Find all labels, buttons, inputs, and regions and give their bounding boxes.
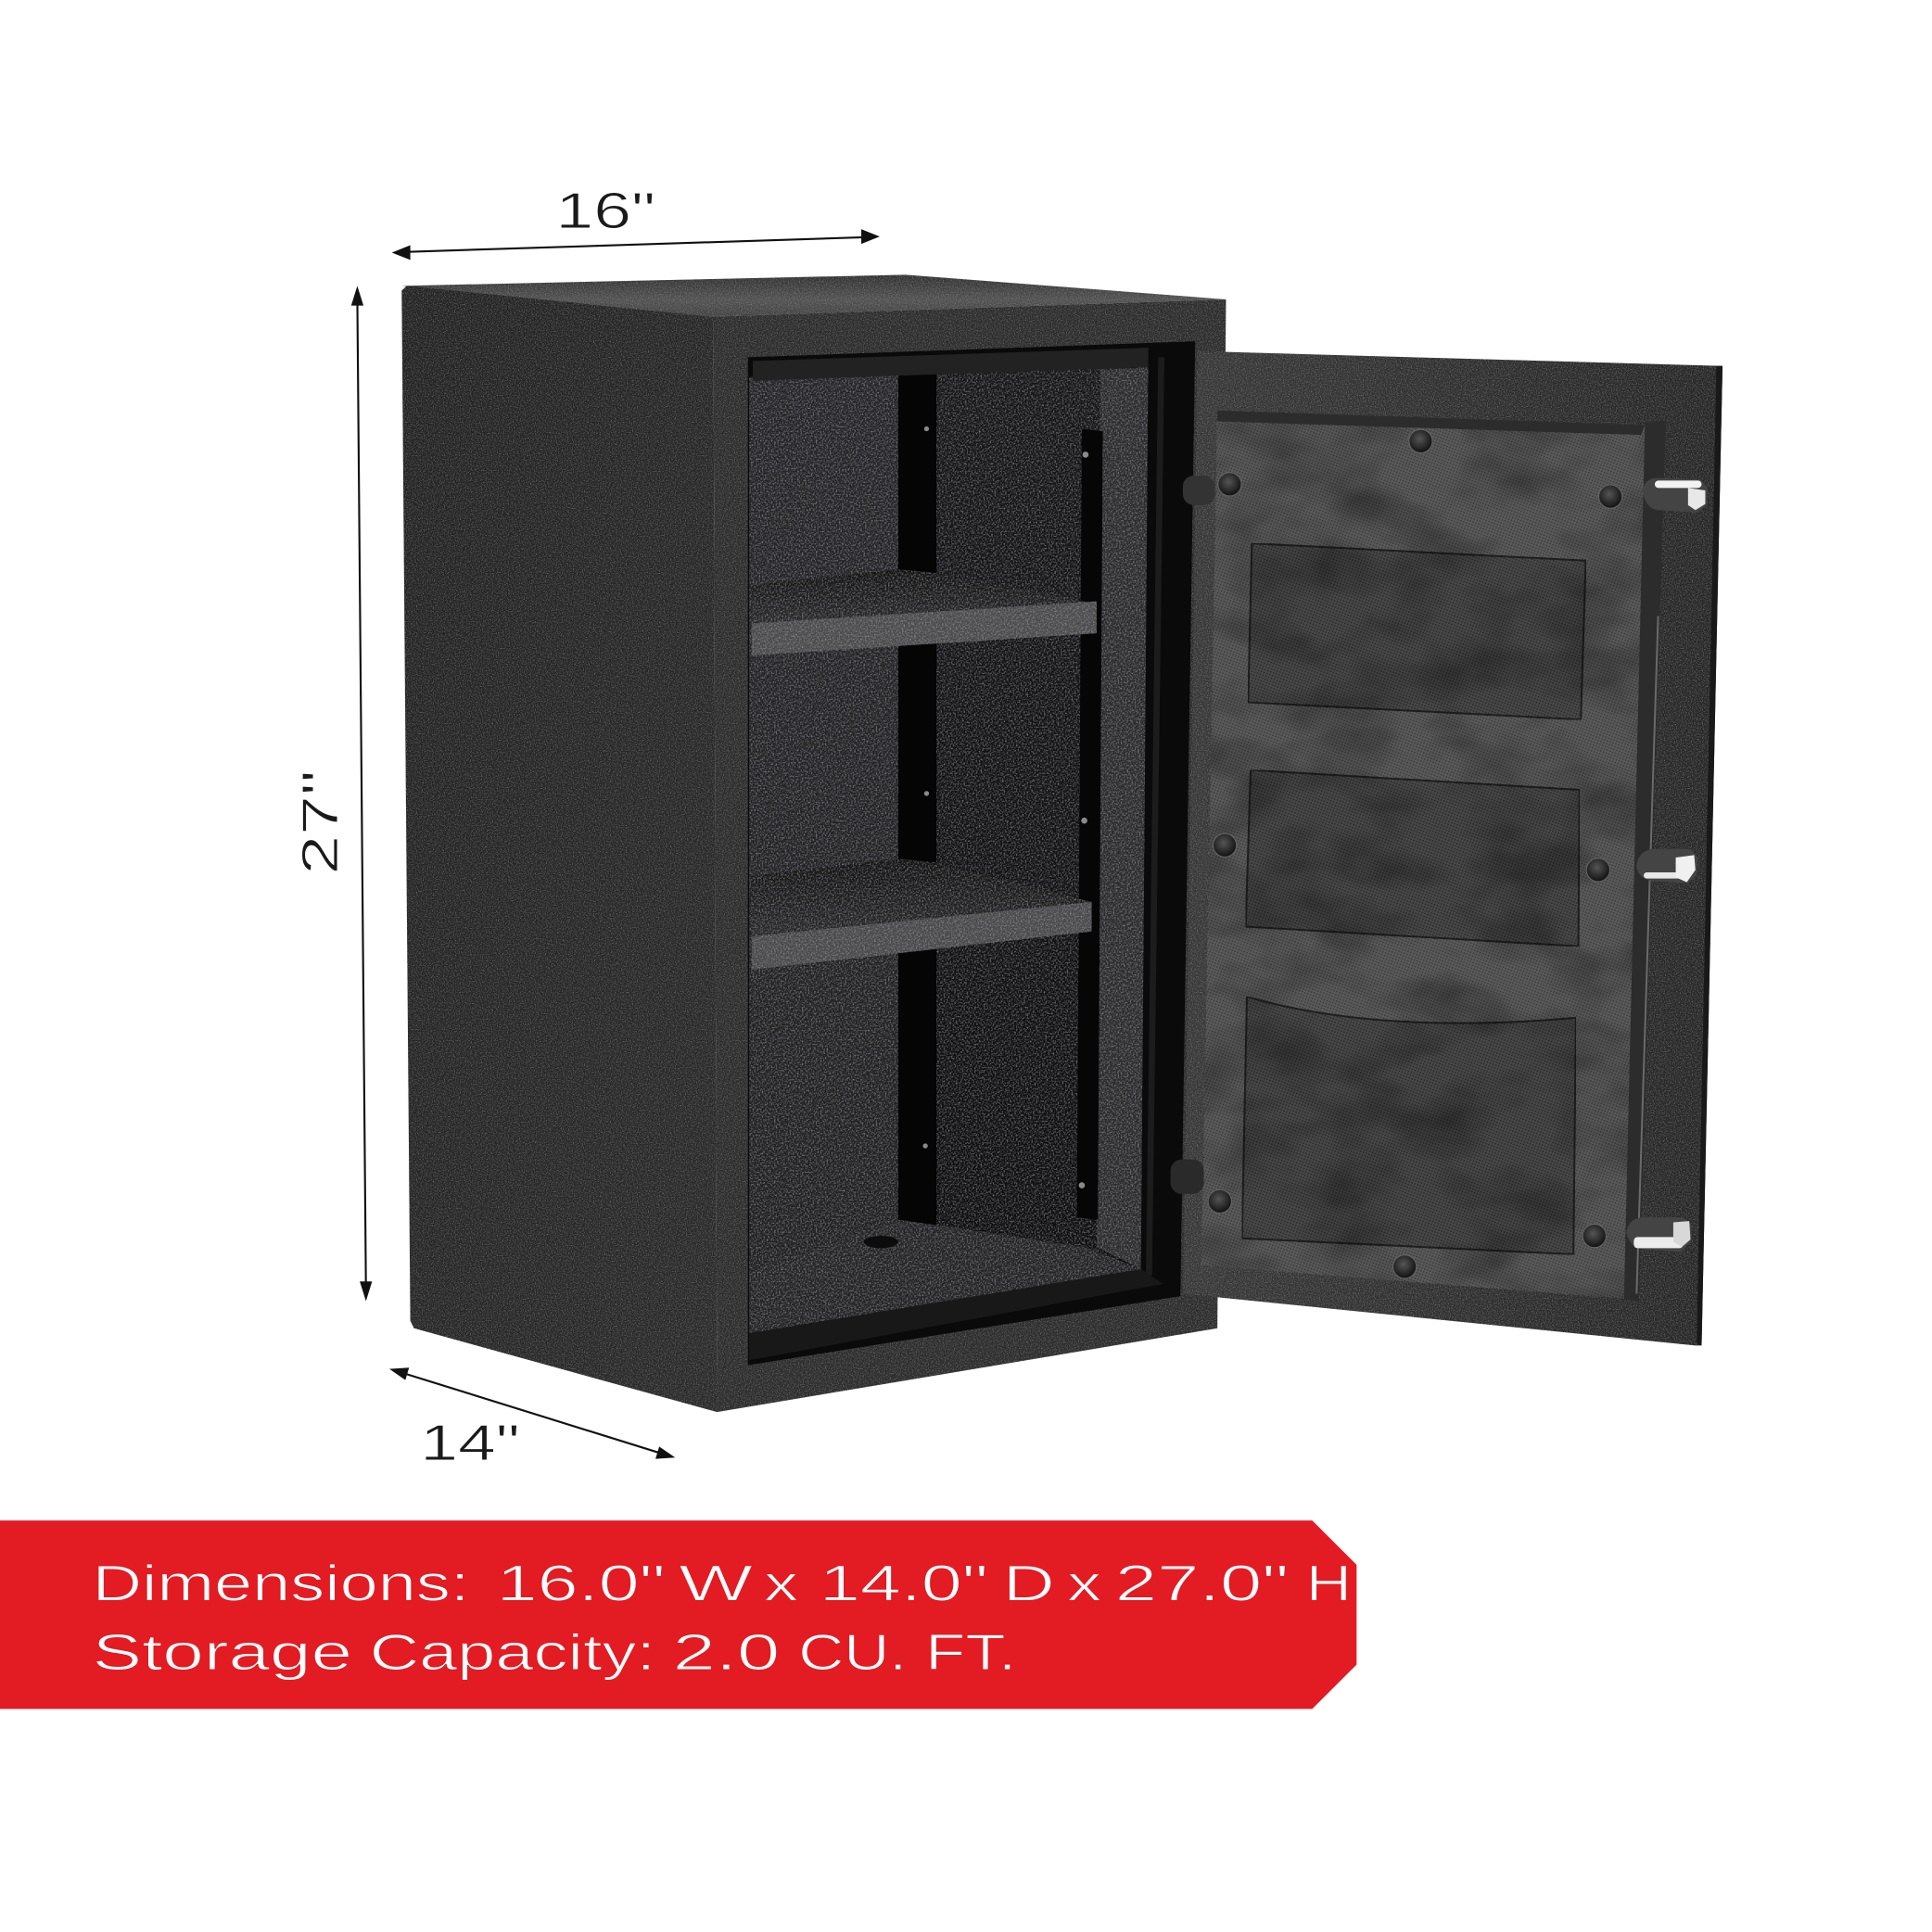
dimensions text: 27.0" [1115,1555,1289,1611]
dimensions text: 14.0" [820,1555,988,1611]
interior back wall [899,367,1149,1259]
bevel highlight [1635,616,1659,1294]
red banner [0,1520,1356,1709]
lower shelf top [752,858,1092,936]
floor bolt [864,1236,898,1248]
label: height 27 inches: 27" [292,770,349,875]
door opening [748,341,1195,1366]
rivets [1208,429,1622,1278]
storage capacity text [93,1624,1016,1681]
pocket one [1248,543,1586,719]
lower shelf front edge [752,902,1092,970]
safe body [401,274,1226,1412]
dimensions text: H [1306,1555,1352,1611]
chrome bolt top [1643,478,1708,513]
bottom door gasket [749,1269,1163,1360]
left side face [401,286,718,1412]
pocket three [1242,997,1576,1254]
height arrow [351,286,372,1302]
right gasket highlight [1146,357,1164,1276]
hinge top [1183,476,1214,505]
dimensions text: W [679,1555,754,1611]
banner shape [0,1520,1356,1709]
label: depth 14 inches: 14" [420,1415,520,1471]
hinge bottom [1171,1160,1204,1194]
shelf rail [1077,429,1103,1220]
dimensions text: x [764,1555,798,1611]
upper shelf front edge [752,602,1097,655]
storage capacity text: 2.0 [673,1624,780,1681]
dimensions text: x [1067,1555,1101,1611]
rear corner black strip [898,372,936,1232]
top door gasket [753,348,1158,381]
fabric panel top lip [1217,411,1645,435]
door plate [1183,351,1722,1345]
floor carpet [749,1220,1142,1333]
shelf screws [922,426,1088,1188]
open door [1171,351,1722,1345]
chrome bolt middle [1636,849,1697,883]
storage capacity text: FT. [925,1624,1016,1681]
dimensions text: 16.0" [497,1555,666,1611]
top face [401,274,1226,317]
label: width 16 inches: 16" [555,183,655,239]
depth arrow [389,1367,675,1459]
interior right wall carpet [1097,367,1149,1269]
right door gasket [1141,342,1193,1294]
front frame [714,299,1226,1412]
dimensions text: D [1003,1555,1055,1611]
dimensions text: Dimensions: [93,1555,469,1611]
storage capacity text: Capacity: [370,1624,655,1681]
chrome bolt bottom [1626,1217,1692,1252]
inner panel bevel [1617,420,1666,1302]
width arrow [392,229,880,260]
storage capacity text: Storage [93,1624,352,1681]
storage capacity text: CU. [798,1624,907,1681]
door right edge [1697,366,1722,1345]
interior left wall carpet [749,372,899,1294]
dimensions text [93,1555,1352,1611]
upper shelf top [752,569,1097,624]
fabric panel [1201,411,1645,1299]
pocket two [1246,770,1580,947]
